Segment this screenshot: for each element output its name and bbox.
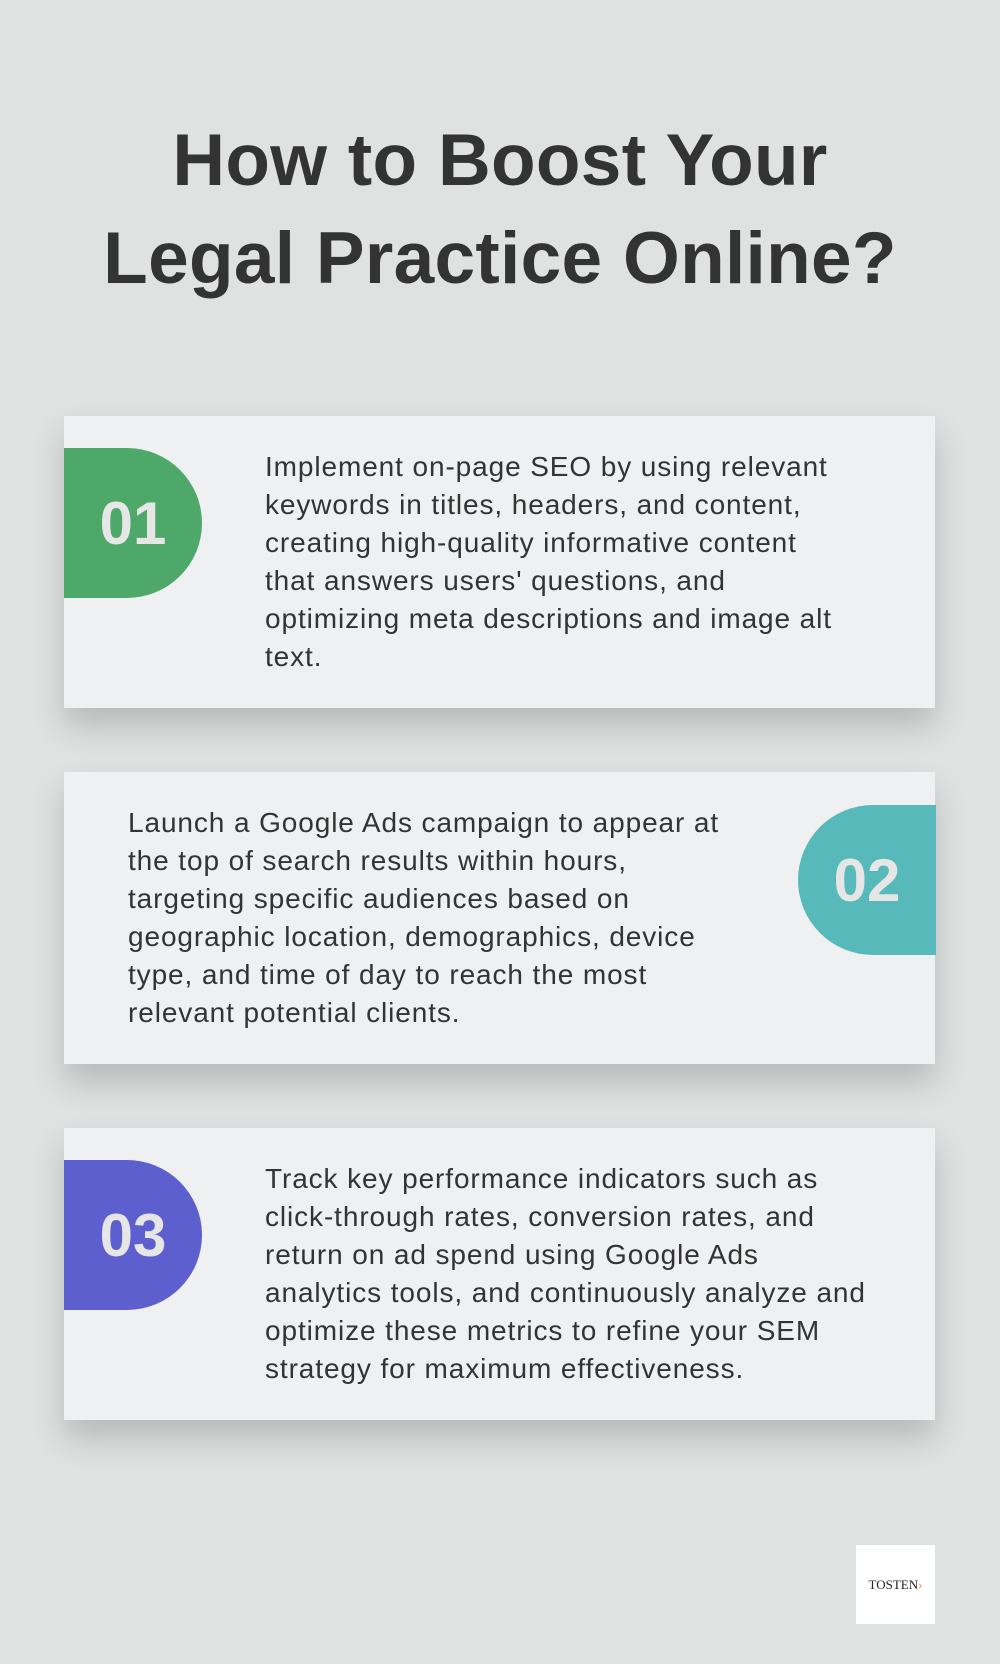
card 1	[64, 416, 935, 708]
card 3	[64, 1128, 935, 1420]
title	[103, 120, 897, 299]
text 1: optimizing meta descriptions and image alt	[265, 603, 832, 634]
text 2: relevant potential clients.	[128, 997, 460, 1028]
logo: ›	[918, 1576, 922, 1592]
badge 02	[798, 805, 936, 955]
logo	[856, 1545, 935, 1624]
text 2: geographic location, demographics, device	[128, 921, 696, 952]
text 3: return on ad spend using Google Ads	[265, 1239, 759, 1270]
text 2	[128, 807, 719, 1028]
badge 01	[64, 448, 202, 598]
badge 03	[64, 1160, 202, 1310]
title: Legal Practice Online?	[103, 218, 897, 299]
text 1: text.	[265, 641, 322, 672]
text 1: that answers users' questions, and	[265, 565, 726, 596]
text 3: click-through rates, conversion rates, and	[265, 1201, 815, 1232]
text 2: the top of search results within hours,	[128, 845, 627, 876]
title: How to Boost Your	[172, 120, 828, 201]
logo: TOSTEN	[869, 1576, 918, 1592]
text 1	[265, 451, 832, 672]
text 2: targeting specific audiences based on	[128, 883, 630, 914]
text 1: creating high-quality informative content	[265, 527, 797, 558]
text 2: Launch a Google Ads campaign to appear at	[128, 807, 719, 838]
badge 03: 03	[100, 1202, 166, 1268]
text 3: strategy for maximum effectiveness.	[265, 1353, 744, 1384]
text 3: optimize these metrics to refine your SEM	[265, 1315, 820, 1346]
text 1: keywords in titles, headers, and content,	[265, 489, 802, 520]
card 2	[64, 772, 935, 1064]
text 1: Implement on-page SEO by using relevant	[265, 451, 828, 482]
text 3	[265, 1163, 866, 1384]
text 3: analytics tools, and continuously analyze and	[265, 1277, 866, 1308]
badge 02: 02	[834, 846, 900, 914]
text 2: type, and time of day to reach the most	[128, 959, 647, 990]
text 3: Track key performance indicators such as	[265, 1163, 818, 1194]
badge 01: 01	[100, 490, 166, 556]
